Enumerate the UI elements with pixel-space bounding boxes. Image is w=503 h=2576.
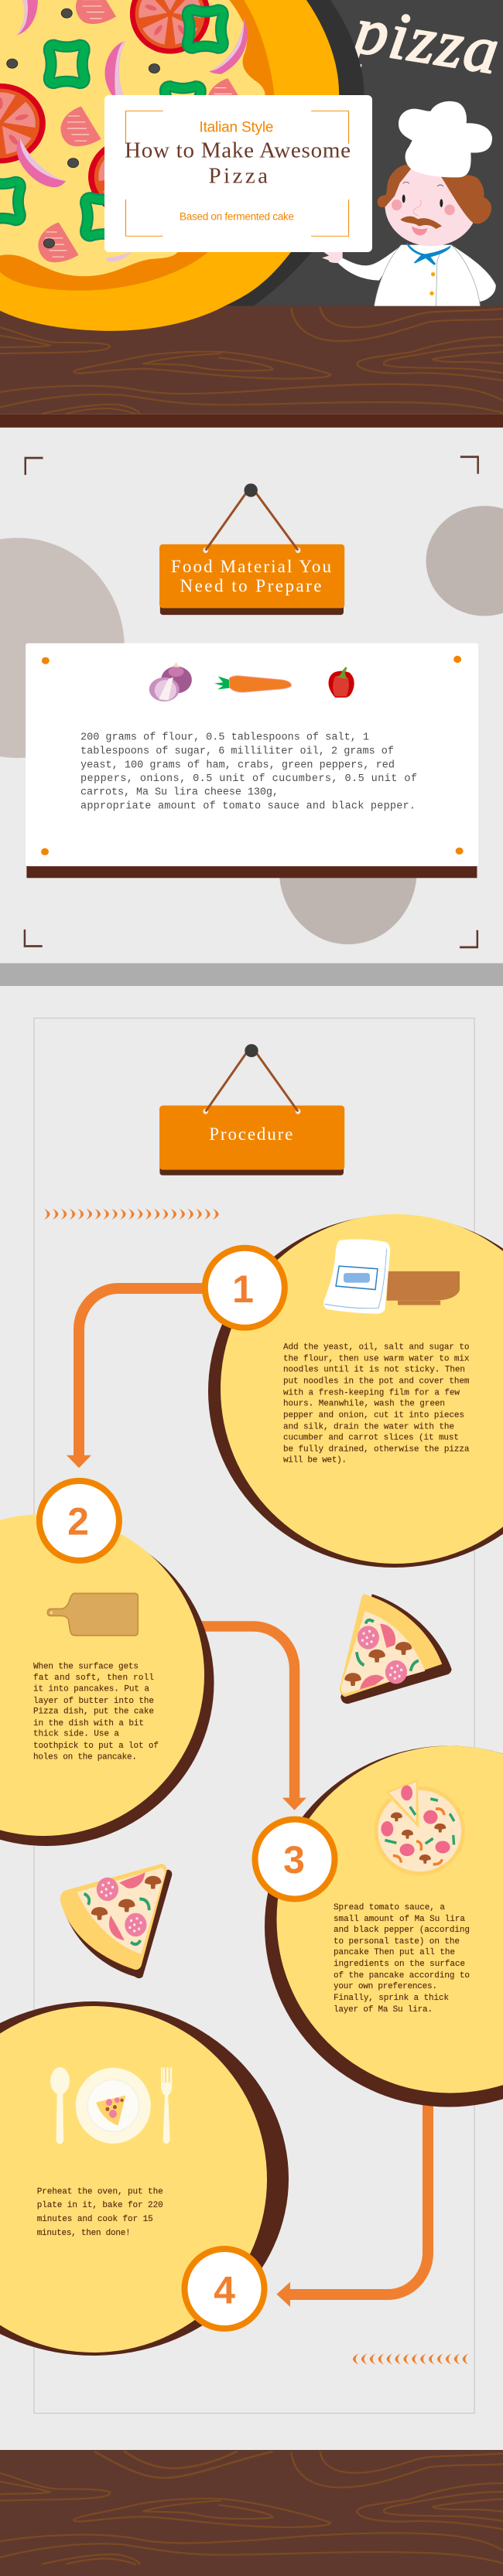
- step 3 text: [334, 1903, 470, 2015]
- step 3 text: Spread tomato sauce, a: [334, 1903, 445, 1912]
- step 1: [205, 1214, 503, 1568]
- step 4 text: minutes and cook for 15: [37, 2215, 153, 2224]
- hanging sign: food material: Need to Prepare: [180, 576, 322, 595]
- ingredients card: [26, 643, 478, 878]
- onion slices: [17, 0, 248, 262]
- icon: onions: [149, 662, 192, 701]
- green peppers: [0, 9, 223, 236]
- chef body: [374, 245, 496, 307]
- chef face: [385, 164, 477, 246]
- tagline: Based on fermented cake: [180, 210, 294, 223]
- step 4: [0, 2001, 289, 2356]
- pizza slice right: [340, 1594, 452, 1704]
- step 4 text: Preheat the oven, put the: [37, 2188, 163, 2197]
- step 3: [255, 1746, 503, 2107]
- pizza cheese: [0, 0, 265, 276]
- chef illustration: [322, 101, 496, 307]
- subtitle: Italian Style: [200, 119, 274, 136]
- icon: plate with cutlery: [50, 2067, 172, 2144]
- step 4 text: minutes, then done!: [37, 2229, 131, 2238]
- chef arm: [338, 245, 402, 281]
- pizza sauce ring: [0, 0, 274, 291]
- background circles: [0, 506, 503, 944]
- step 3 text: your own preferences.: [334, 1982, 437, 1991]
- title card: [104, 95, 372, 252]
- hero panel: [0, 0, 503, 428]
- badge 4: [184, 2249, 265, 2329]
- frame: [34, 1018, 474, 2413]
- icon: whole pizza: [374, 1778, 465, 1876]
- step 4 text: [37, 2188, 163, 2238]
- step 1 circle: [208, 1214, 503, 1568]
- main title: How to Make Awesome: [125, 138, 351, 162]
- main title: Pizza: [209, 164, 268, 189]
- hanging sign: food material: [159, 483, 344, 615]
- step 3 text: ingredients on the surface: [334, 1960, 465, 1969]
- step 4 text: plate in it, bake for 220: [37, 2201, 163, 2210]
- ingredients text: tablespoons of sugar, 6 milliliter oil, 2 grams of: [80, 746, 394, 758]
- chef features: [392, 182, 455, 235]
- ingredients text: appropriate amount of tomato sauce and black pepper.: [80, 800, 416, 812]
- hanging sign: procedure: Procedure: [209, 1124, 293, 1144]
- ingredients text: yeast, 100 grams of ham, crabs, green peppers, red: [80, 759, 395, 772]
- step 2 text: in the dish with a bit: [33, 1719, 144, 1728]
- arrow: step 3 to 4: [276, 2096, 428, 2307]
- step 2 text: layer of butter into the: [33, 1697, 154, 1706]
- step 3 circle: [265, 1746, 503, 2107]
- step 3 text: of the pancake according to: [334, 1971, 470, 1981]
- step 1 text: the flour, then use warm water to mix: [283, 1355, 470, 1364]
- step 3 text: Finally, sprink a thick: [334, 1994, 449, 2003]
- chef hand: [322, 251, 343, 263]
- step 2 text: When the surface gets: [33, 1663, 139, 1672]
- pizza slice left: [60, 1864, 172, 1978]
- step 3 text: layer of Ma Su lira.: [334, 2005, 433, 2015]
- corner brackets: [25, 457, 478, 947]
- step 2 text: holes on the pancake.: [33, 1753, 137, 1762]
- step 1 text: Add the yeast, oil, salt and sugar to: [283, 1343, 469, 1352]
- badge 1: [205, 1248, 285, 1328]
- step 1 text: [283, 1343, 470, 1465]
- ingredients text: 200 grams of flour, 0.5 tablespoons of salt, 1: [80, 732, 369, 744]
- badge 4: 4: [214, 2269, 235, 2312]
- step 3 text: small amount of Ma Su lira: [334, 1915, 465, 1924]
- main title: [125, 138, 351, 189]
- step 1 text: will be wet).: [283, 1455, 347, 1465]
- step 3 text: and black pepper (according: [334, 1926, 470, 1935]
- icon: cutting board: [47, 1593, 138, 1636]
- wooden table: [0, 306, 503, 428]
- arrow: step 1 to 2: [67, 1288, 205, 1468]
- badge 3: 3: [283, 1838, 305, 1882]
- chef coat lines: [374, 245, 481, 307]
- ham pieces: [38, 0, 248, 262]
- step 2 circle: [0, 1514, 214, 1846]
- step 2 text: toothpick to put a lot of: [33, 1742, 159, 1751]
- step 1 text: put noodles in the pot and cover them: [283, 1377, 470, 1387]
- tomato slices: [0, 0, 210, 217]
- chalkboard background: [0, 0, 503, 306]
- ingredients text: [80, 732, 417, 812]
- step 2 text: Pizza dish, put the cake: [33, 1708, 154, 1717]
- panel: food material: [0, 457, 503, 986]
- step 4 circle: [0, 2001, 289, 2356]
- step 1 text: pepper and onion, cut it into pieces: [283, 1411, 464, 1421]
- pizza pan: [0, 0, 364, 306]
- chef hat: [399, 101, 492, 177]
- pizza crust: [0, 0, 339, 331]
- step 1 text: cucumber and carrot slices (it must: [283, 1433, 459, 1442]
- step 1 text: hours. Meanwhile, wash the green: [283, 1400, 445, 1409]
- step 2 text: it into pancakes. Put a: [33, 1685, 149, 1694]
- arrow: step 2 to 3: [197, 1626, 306, 1810]
- step 1 text: noodles until it is not sticky. Then: [283, 1365, 465, 1374]
- olives: [7, 9, 159, 248]
- hanging sign: procedure: [159, 1044, 344, 1175]
- badge 2: [39, 1481, 119, 1561]
- card corner marks: [125, 111, 349, 236]
- chef scarf: [407, 242, 451, 265]
- chevron row top: [44, 1209, 218, 1220]
- step 3 text: to personal taste) on the: [334, 1937, 460, 1947]
- ingredients text: carrots, Ma Su lira cheese 130g,: [80, 786, 279, 798]
- step 1 text: and silk, drain the water with the: [283, 1423, 454, 1432]
- step 2 text: fat and soft, then roll: [33, 1674, 154, 1683]
- step 2 text: thick side. Use a: [33, 1730, 119, 1739]
- panel: procedure: [0, 1018, 503, 2413]
- footer wood: [0, 2450, 503, 2576]
- step 1 text: with a fresh-keeping film for a few: [283, 1388, 460, 1397]
- giant pizza: [0, 0, 339, 331]
- badge 1: 1: [232, 1268, 254, 1311]
- step 1 text: be fully drained, otherwise the pizza: [283, 1445, 470, 1454]
- icon: flour bag and bowl: [323, 1240, 460, 1314]
- icon: carrot: [214, 676, 291, 692]
- badge 3: [255, 1819, 334, 1899]
- chef buttons: [429, 272, 435, 295]
- hanging sign: food material: Food Material You: [171, 557, 331, 576]
- icon: red pepper: [328, 667, 354, 698]
- chevron row bottom: [353, 2354, 468, 2365]
- step 2 text: [33, 1663, 159, 1762]
- badge 2: 2: [67, 1500, 89, 1544]
- step 3 text: pancake Then put all the: [334, 1948, 455, 1957]
- ingredients text: peppers, onions, 0.5 unit of cucumbers, 0.5 unit of: [80, 773, 417, 785]
- chef hair: [378, 164, 491, 223]
- divider band: [0, 964, 503, 986]
- step 2: [0, 1481, 214, 1846]
